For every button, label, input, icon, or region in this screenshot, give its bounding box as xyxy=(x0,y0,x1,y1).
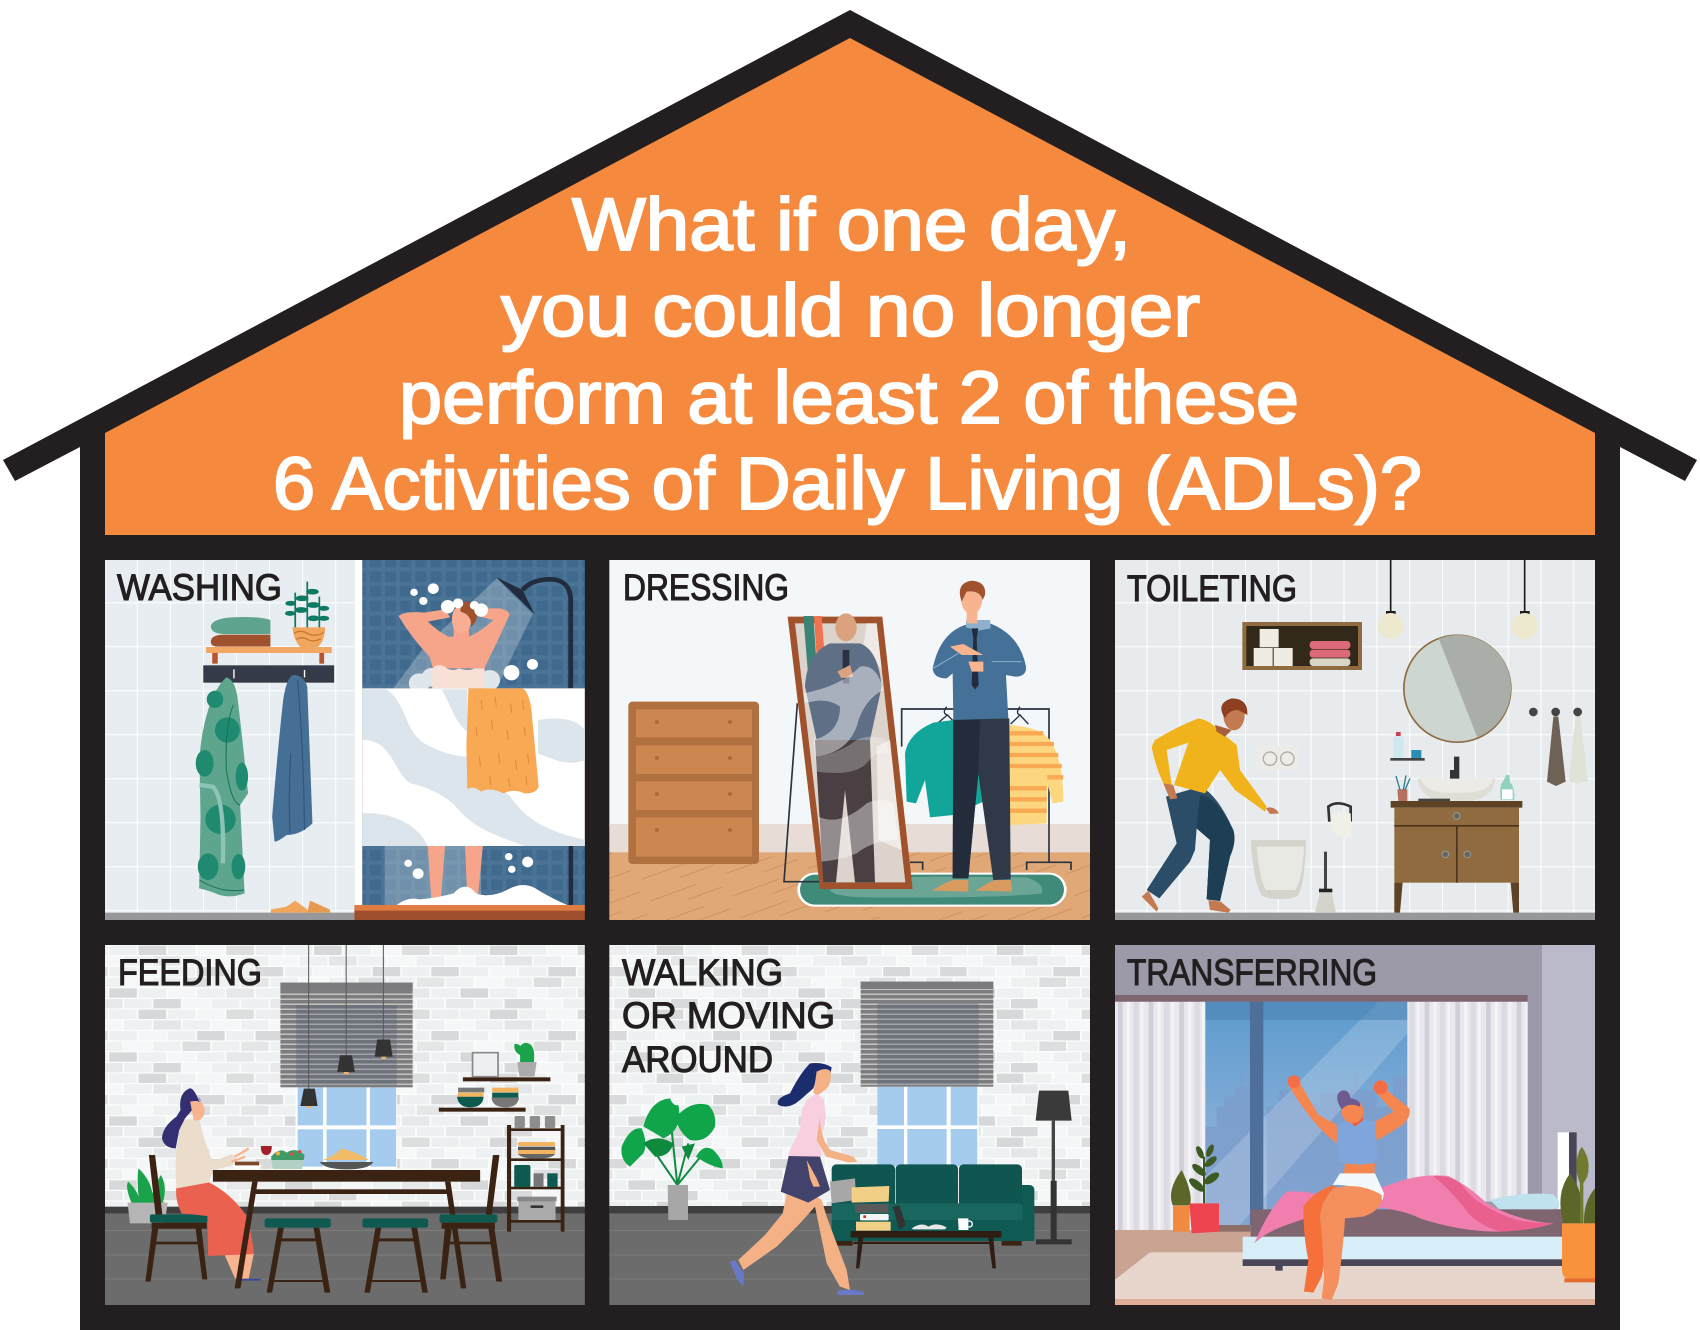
man showering xyxy=(399,598,509,899)
icon: coffee table with books and mug xyxy=(851,1186,1001,1268)
man adjusting tie xyxy=(932,581,1026,892)
right chair xyxy=(440,1155,502,1282)
icon: storage rack xyxy=(507,1116,565,1232)
icon: vanity and sink xyxy=(1390,732,1522,913)
icon: potted plant xyxy=(127,1168,168,1223)
icon: floor lamp xyxy=(1036,1091,1072,1244)
curtains xyxy=(1115,995,1528,1230)
panel: toileting xyxy=(1115,560,1595,920)
icon: wall shelf with rolls and towels xyxy=(1242,622,1362,670)
label: walking or moving around: OR MOVING xyxy=(622,995,835,1036)
rug xyxy=(797,873,1067,907)
icon: toilet xyxy=(1251,840,1306,899)
panel: dressing xyxy=(609,560,1090,920)
icon: slippers xyxy=(270,901,330,913)
label: washing: WASHING xyxy=(117,567,282,608)
title: 6 Activities of Daily Living (ADLs)? xyxy=(273,442,1422,525)
label: walking or moving around: AROUND xyxy=(622,1039,773,1080)
label: toileting: TOILETING xyxy=(1127,568,1297,609)
icon: pendant lights xyxy=(300,945,393,1108)
icon: foreground plant xyxy=(1560,1147,1597,1282)
pink blanket xyxy=(1254,1175,1553,1243)
shower tiles xyxy=(362,560,585,906)
label: walking or moving around: WALKING xyxy=(622,952,783,993)
panel: transferring xyxy=(1115,945,1597,1305)
soap bubbles xyxy=(404,583,538,879)
icon: bed xyxy=(1243,1132,1577,1271)
floor and rug xyxy=(1115,1230,1595,1305)
label: dressing: DRESSING xyxy=(623,567,789,608)
shower curtain xyxy=(362,688,585,846)
label: walking or moving around xyxy=(622,952,835,1080)
woman eating xyxy=(162,1088,261,1281)
icon: towels on shelf xyxy=(206,582,332,664)
icon: shower head xyxy=(497,577,571,688)
icon: pendant lamps xyxy=(1378,560,1538,639)
icon: monstera plant xyxy=(621,1098,723,1220)
icon: flush plate xyxy=(1262,746,1295,770)
window with city view xyxy=(1205,1002,1407,1232)
title xyxy=(273,183,1422,525)
icon: window with blinds xyxy=(280,983,413,1169)
icon: round mirror xyxy=(1403,634,1512,743)
title: What if one day, xyxy=(572,183,1131,266)
man bending xyxy=(1142,698,1279,913)
icon: green robe xyxy=(196,677,248,896)
label: transferring: TRANSFERRING xyxy=(1127,952,1377,993)
icon: dresser xyxy=(628,702,759,864)
roof panel: orange attic with title xyxy=(105,38,1595,535)
icon: potted plants xyxy=(1171,1143,1221,1233)
icon: window with blinds xyxy=(861,982,993,1168)
icon: blue towel xyxy=(234,669,312,842)
icon: toilet roll and brush xyxy=(1315,803,1352,913)
dining table xyxy=(213,1170,480,1288)
icon: clothes rack with garments xyxy=(902,707,1071,870)
icon: wall hooks with towels xyxy=(1529,708,1588,786)
label: feeding: FEEDING xyxy=(118,952,262,993)
title: perform at least 2 of these xyxy=(399,356,1299,439)
panel: feeding xyxy=(105,945,585,1305)
icon: food on table xyxy=(232,1146,373,1169)
title: you could no longer xyxy=(501,269,1200,352)
icon: standing mirror xyxy=(784,613,913,889)
attic background xyxy=(105,38,1595,535)
panel: washing xyxy=(105,560,585,920)
left chair xyxy=(145,1155,208,1282)
icon: wall shelves xyxy=(439,1043,550,1112)
icon: teal sofa xyxy=(830,1164,1034,1246)
stools xyxy=(265,1218,428,1293)
woman walking xyxy=(730,1063,864,1295)
hook rail xyxy=(203,665,334,683)
panel: walking or moving around xyxy=(609,945,1090,1305)
shower base and foam xyxy=(354,885,585,920)
woman stretching xyxy=(1288,1075,1410,1300)
